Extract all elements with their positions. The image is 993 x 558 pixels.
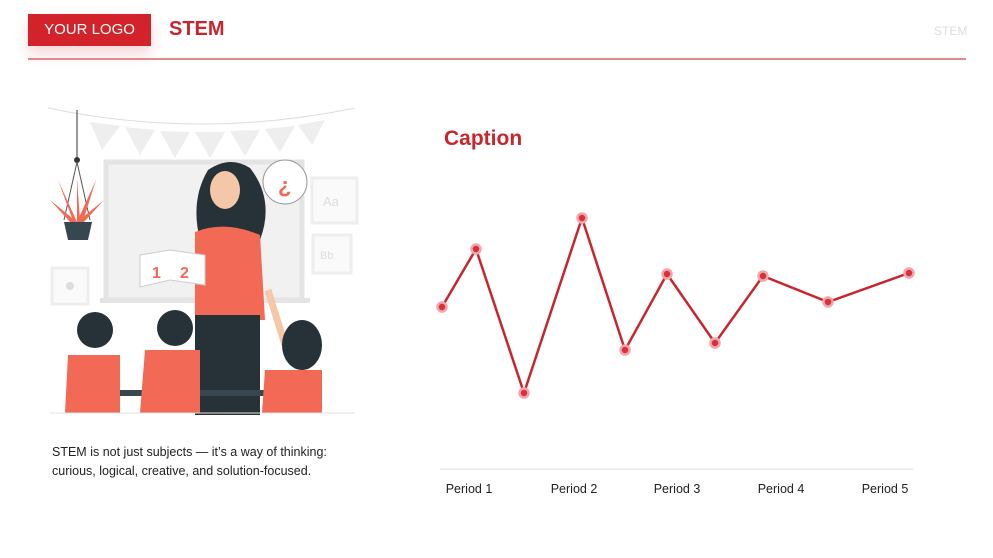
line chart: Period 5 [862, 482, 908, 496]
chart caption: Caption [444, 127, 522, 150]
line chart: Period 2 [551, 482, 597, 496]
divider [28, 58, 966, 60]
logo [28, 14, 151, 46]
illustration: teacher and students: 1 [152, 265, 161, 282]
illustration: teacher and students: 2 [180, 265, 189, 282]
illustration: teacher and students: Aa [323, 194, 340, 209]
illustration: teacher and students: Bb [320, 250, 333, 262]
header title: STEM [169, 18, 225, 40]
line chart: Period 3 [654, 482, 700, 496]
line chart: Period 1 [446, 482, 492, 496]
illustration: teacher and students: ¿ [278, 173, 291, 198]
logo: YOUR LOGO [44, 21, 135, 38]
description text: STEM is not just subjects — it’s a way of thinking: curious, logical, creative, and solution-focused. [52, 445, 327, 478]
line chart: Period 4 [758, 482, 804, 496]
header tag: STEM [934, 24, 967, 38]
illustration: teacher and students [48, 108, 358, 415]
